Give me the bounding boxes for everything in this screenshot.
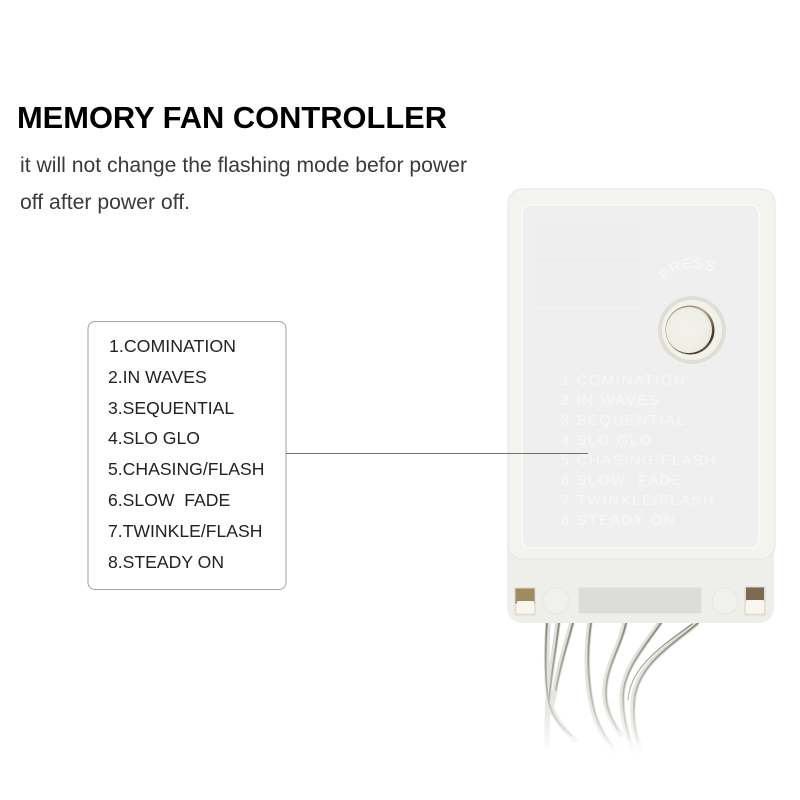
mode names: 1.COMINATION	[109, 336, 236, 356]
mode names: 2.IN WAVES	[108, 367, 207, 387]
embossed label area	[535, 222, 642, 308]
description text	[20, 153, 467, 214]
leader line	[286, 452, 588, 454]
button	[658, 296, 726, 364]
embossed mode list: 5.CHASING/FLASH	[561, 453, 717, 469]
lid	[508, 188, 776, 560]
mode names: 6.SLOW FADE	[108, 490, 230, 510]
label recess	[578, 587, 702, 614]
embossed mode list: 2.IN WAVES	[561, 393, 660, 409]
mode names: 5.CHASING/FLASH	[108, 459, 264, 479]
mode names: 8.STEADY ON	[108, 552, 224, 572]
terminal: right latch	[745, 587, 765, 615]
embossed mode list: 6.SLOW FADE	[561, 473, 683, 489]
mode names: 7.TWINKLE/FLASH	[108, 521, 262, 541]
wires	[546, 623, 698, 752]
embossed mode list: 4.SLO GLO	[561, 433, 653, 449]
description text: it will not change the flashing mode befor power	[20, 153, 467, 177]
controller device	[507, 188, 776, 747]
embossed mode list: 3.SEQUENTIAL	[561, 413, 687, 429]
embossed press label: PRESS	[659, 258, 714, 280]
screw covers	[543, 588, 569, 614]
mode names: 3.SEQUENTIAL	[108, 398, 234, 418]
description text: off after power off.	[20, 190, 190, 214]
mode names	[108, 336, 264, 572]
embossed mode list: 7.TWINKLE/FLASH	[561, 493, 715, 509]
base housing	[507, 540, 774, 623]
embossed mode list: 1.COMINATION	[561, 373, 686, 389]
embossed mode list	[561, 373, 717, 529]
terminal: left latch	[515, 588, 535, 615]
mode names: 4.SLO GLO	[108, 428, 200, 448]
panel: flashing mode list	[88, 322, 286, 590]
embossed mode list: 8.STEADY ON	[561, 513, 676, 529]
title: MEMORY FAN CONTROLLER	[17, 101, 447, 135]
